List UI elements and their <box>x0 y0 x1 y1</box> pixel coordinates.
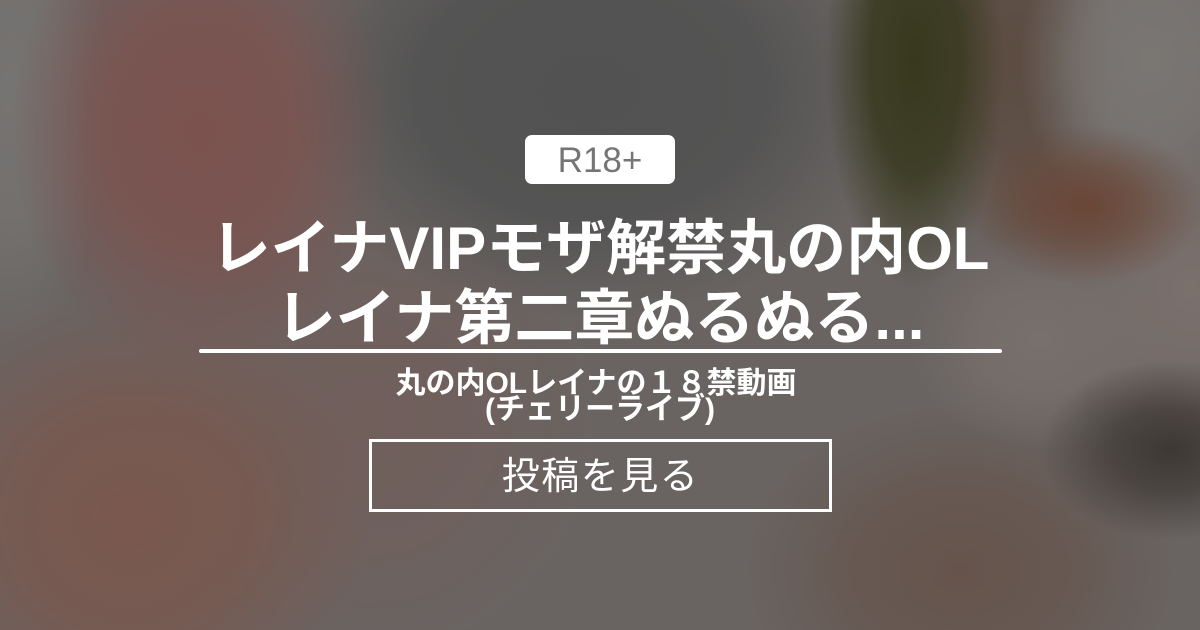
title: レイナVIPモザ解禁丸の内OL <box>211 215 989 282</box>
badge: R18+ <box>525 135 675 184</box>
title: レイナ第二章ぬるぬる... <box>276 285 924 352</box>
button: view post <box>369 439 832 512</box>
subtitle: (チェリーライブ) <box>485 393 715 426</box>
title <box>211 215 989 352</box>
divider <box>199 349 1002 352</box>
button: view post: 投稿を見る <box>502 456 699 498</box>
subtitle: 丸の内OLレイナの１８禁動画 <box>395 367 797 400</box>
subtitle <box>395 367 797 426</box>
badge: R18+: R18+ <box>558 141 642 180</box>
